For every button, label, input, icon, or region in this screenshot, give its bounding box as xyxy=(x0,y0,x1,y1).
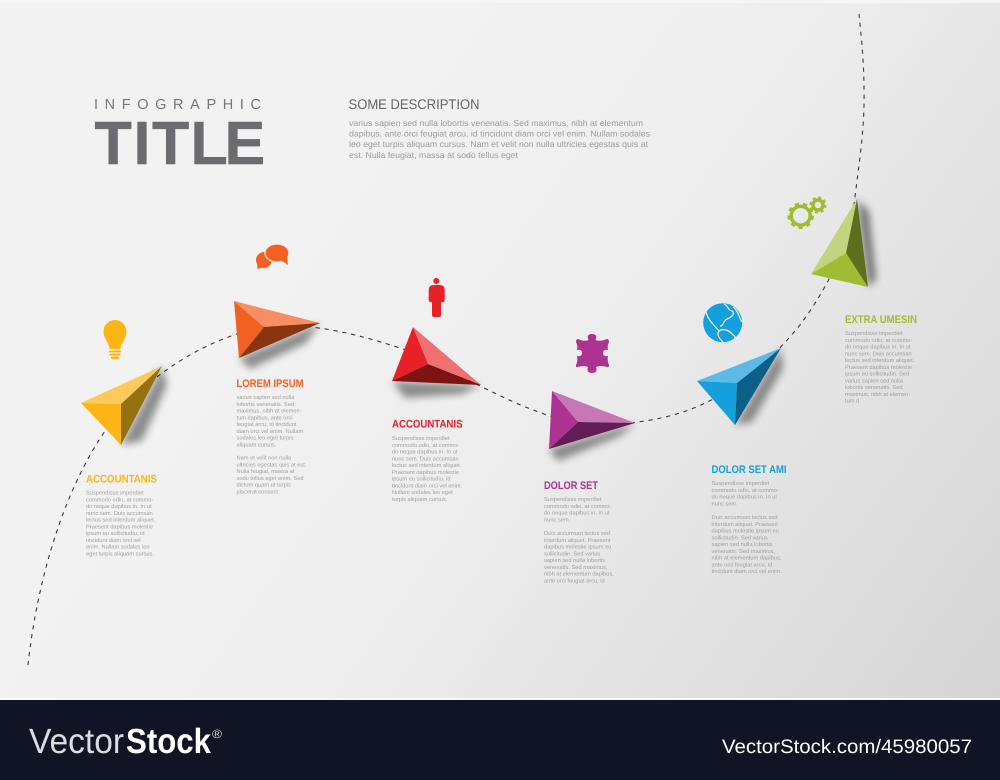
text: step 5: Suspendisse imperdiet xyxy=(712,480,769,487)
icon: puzzle piece xyxy=(576,334,609,373)
text: step 6: do neque dapibus in. In ut xyxy=(845,344,911,350)
icon: gears xyxy=(789,198,826,228)
text: step 4: do neque dapibus in. In ut xyxy=(544,510,610,516)
text: step 5: sollicitudin. Sed varius xyxy=(712,534,768,541)
text: step 3: commodo odio, at commo- xyxy=(392,442,459,449)
text: step 3: tincidunt diam orci vel enim. xyxy=(392,482,463,489)
text: step 2: lobortis venenatis. Sed xyxy=(236,401,294,408)
text: step 4: venenatis. Sed maximus, xyxy=(544,564,608,571)
text: step 3: ipsum eu sollicitudiu, id xyxy=(392,476,450,483)
text: step 3: do neque dapibus in. In ut xyxy=(392,448,458,456)
text: step 5 xyxy=(712,464,786,575)
footer logo: ® xyxy=(212,727,222,741)
text: step 2: Nam et velit non nulla xyxy=(236,454,292,462)
text: step 2: maximus, nibh at elemen- xyxy=(236,408,302,414)
text: step 2: sodo tellus eget enim. Sed xyxy=(236,475,304,482)
text: step 2: LOREM IPSUM xyxy=(236,378,304,390)
text: step 3: lectus sed interdum aliquet. xyxy=(392,462,462,469)
text: step 1: do neque dapibus in. In ut xyxy=(86,503,152,510)
description block: est. Nulla feugiat, massa at sodo tellus eget xyxy=(349,150,519,160)
text: step 5: interdum aliquet. Praesent xyxy=(712,521,778,528)
text: step 4: sollicitudin. Sed varius xyxy=(544,550,600,557)
footer logo: Vector xyxy=(29,722,124,761)
description block: varius sapien sed nulla lobortis venenatis. Sed maximus, nibh at elementum xyxy=(349,118,643,128)
step 2: orange pyramid xyxy=(234,301,320,369)
step 6: green pyramid xyxy=(811,199,876,287)
text: step 2: placerat consect xyxy=(236,488,278,495)
icon: speech bubbles xyxy=(256,244,289,269)
text: step 6: lobortis venenatis. Sed xyxy=(845,384,903,391)
footer logo xyxy=(29,722,222,761)
text: step 4: DOLOR SET xyxy=(544,480,598,492)
text: step 6: commodo odio, at commo- xyxy=(845,337,912,344)
text: step 3: Praesent dapibus molestie xyxy=(392,469,459,476)
text: step 2: tum dapibus, ante orci xyxy=(236,414,292,421)
text: step 6 xyxy=(845,314,917,405)
text: step 2: Nulla feugiat, massa at xyxy=(236,468,295,475)
text: step 1 xyxy=(86,474,157,557)
text: step 6: ipsum eu sollicitudin. Sed xyxy=(845,371,909,378)
step 4: purple pyramid xyxy=(549,391,635,461)
description block: leo eget turpis aliquam cursus. Nam et velit non nulla ultricies egestas quis at xyxy=(349,139,649,149)
text: step 6: Praesent dapibus molestie xyxy=(845,364,912,371)
text: step 1: Suspendisse imperdiet xyxy=(86,490,144,496)
text: step 3: Suspendisse imperdiet xyxy=(392,435,450,442)
text: step 4: dapibus molestie ipsum eu xyxy=(544,544,611,550)
step 1: yellow pyramid xyxy=(81,366,167,445)
icon: light bulb xyxy=(104,320,126,359)
text: step 4: Suspendisse imperdiet xyxy=(544,496,602,503)
text: step 6: Suspendisse imperdiet xyxy=(845,330,903,337)
text: step 1: lectus sed interdum aliquet. xyxy=(86,517,156,524)
text: step 2: dictum quam ut turpis xyxy=(236,482,291,489)
description block: SOME DESCRIPTION xyxy=(348,96,480,112)
text: step 1: nunc sem. Duis accumsan xyxy=(86,510,153,517)
text: step 1: tincidunt diam orci vel xyxy=(86,537,141,544)
text: step 1: eget turpis aliquam cursus. xyxy=(86,550,154,557)
dashed timeline path xyxy=(28,14,864,665)
text: step 4: Duis accumsan lectus sed xyxy=(544,530,610,537)
text: step 5: commodo odio, at commo- xyxy=(712,487,779,494)
footer url: VectorStock.com/45980057 xyxy=(722,736,972,758)
text: step 4: interdum aliquet. Praesent xyxy=(544,537,611,544)
text: step 5: DOLOR SET AMI xyxy=(712,464,786,476)
text: step 6: lectus sed interdum aliquet. xyxy=(845,357,915,364)
text: step 5: tincidunt diam orci vel enim. xyxy=(712,568,782,575)
text: step 6: nunc sem. Duis accumsan xyxy=(845,350,912,357)
text: step 3: turpis aliquam cursus. xyxy=(392,496,448,503)
text: step 4: commodo odio, at commo- xyxy=(544,503,611,510)
text: step 2 xyxy=(236,378,307,495)
text: step 4: sapien sed nulla lobortis xyxy=(544,557,605,564)
text: step 3: nunc sem. Duis accumsan xyxy=(392,455,459,462)
text: step 4: ante orci feugiat arcu, id xyxy=(544,577,605,584)
text: step 5: nunc sem. xyxy=(712,501,738,507)
text: step 3: Nullam sodales leo eget xyxy=(392,489,453,496)
text: step 6: tum d xyxy=(845,398,859,405)
text: step 2: feugiat arcu, id tincidunt xyxy=(236,421,297,428)
text: step 4: nibh at elementum dapibus, xyxy=(544,571,614,578)
text: step 2: sodales leo eget turpis xyxy=(236,435,294,442)
description block xyxy=(348,96,650,160)
text: step 2: ultricies egestas quis at est. xyxy=(236,461,307,468)
text: step 4 xyxy=(544,480,614,584)
text: step 6: varius sapien sed nulla xyxy=(845,377,904,384)
title block: TITLE xyxy=(94,109,265,177)
text: step 5: ante orci feugiat arcu, id xyxy=(712,561,772,568)
footer logo: Stock xyxy=(126,722,211,761)
icon: globe xyxy=(703,303,742,343)
footer bar xyxy=(0,700,1000,780)
text: step 4: nunc sem. xyxy=(544,517,571,523)
text: step 2: aliquam cursus. xyxy=(236,441,277,448)
step 3: red pyramid xyxy=(392,327,481,398)
text: step 6: maximus, nibh at elemen- xyxy=(845,391,910,398)
text: step 5: do neque dapibus in. In ut xyxy=(712,494,777,500)
icon: person xyxy=(429,278,445,317)
text: step 1: enim. Nullam sodales leo xyxy=(86,544,150,551)
text: step 1: commodo odio, at commo- xyxy=(86,496,153,503)
text: step 5: dapibus molestie ipsum eu xyxy=(712,528,779,534)
step 5: blue pyramid xyxy=(697,348,783,425)
text: step 5: Duis accumsan lectus sed xyxy=(712,514,778,521)
text: step 3: ACCOUNTANIS xyxy=(392,418,462,430)
text: step 1: ipsum eu sollicitudiu, id xyxy=(86,530,144,537)
text: step 2: varius sapien sed nulla xyxy=(236,394,295,401)
title block: INFOGRAPHIC xyxy=(94,97,261,113)
text: step 1: Praesent dapibus molestie xyxy=(86,523,153,530)
text: step 5: nibh at elementum dapibus, xyxy=(712,555,782,562)
text: step 2: diam orci vel enim. Nullam xyxy=(236,428,303,435)
text: step 5: venenatis. Sed maximus, xyxy=(712,548,775,555)
text: step 6: EXTRA UMESIN xyxy=(845,314,917,326)
text: step 1: ACCOUNTANIS xyxy=(86,474,157,486)
text: step 5: sapien sed nulla lobortis xyxy=(712,541,773,548)
text: step 3 xyxy=(392,418,463,503)
description block: dapibus, ante orci feugiat arcu, id tincidunt diam orci vel enim. Nullam sodales xyxy=(349,128,650,138)
